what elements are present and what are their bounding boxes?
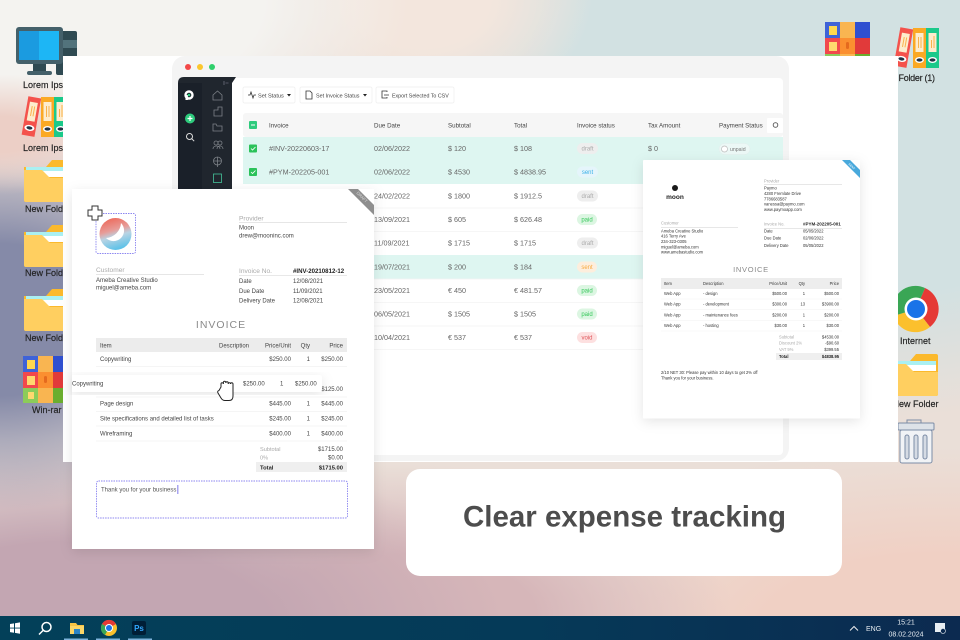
- table header: Payment Status: [719, 122, 763, 129]
- row 3: draft: [581, 194, 594, 200]
- invoice table: [243, 113, 783, 350]
- label: New Folder: New Folder: [892, 399, 939, 409]
- row 9: 10/04/2021: [374, 333, 410, 342]
- ribbon: sent: [842, 160, 860, 178]
- row 8: [374, 308, 597, 320]
- totals: 0%: [260, 456, 268, 462]
- table header: Total: [514, 122, 527, 129]
- desktop icons: left column: [16, 27, 77, 415]
- items table: Price/Unit: [265, 343, 291, 349]
- row 1: unpaid: [730, 147, 746, 153]
- row 9: € 537: [448, 333, 466, 342]
- customer block: miguel@ameba.com: [661, 244, 699, 250]
- provider block: Provider: [239, 216, 264, 222]
- items table: [661, 278, 842, 331]
- row 2: #PYM-202205-001: [269, 168, 329, 176]
- row 2: 02/06/2022: [374, 168, 410, 176]
- icon: move cursor cross: [88, 206, 102, 220]
- icon: win-rar archive top right: [825, 22, 870, 69]
- invoice meta: Invoice No.: [764, 222, 784, 226]
- items table: - development: [703, 302, 730, 306]
- items table: - maintenance fees: [703, 312, 738, 318]
- panel: app window: [172, 56, 789, 461]
- panel: right invoice document: [643, 160, 860, 418]
- row dividers: [243, 208, 783, 350]
- icon: search: [186, 134, 194, 141]
- provider block: drew@mooninc.com: [239, 234, 294, 240]
- provider block: vanessa@paymo.com: [764, 202, 805, 206]
- row 6: 19/07/2021: [374, 262, 410, 272]
- items table: Item: [100, 343, 112, 349]
- provider block: 7786683587: [764, 196, 787, 202]
- table header: [243, 113, 783, 137]
- invoice meta: 11/09/2021: [293, 289, 323, 295]
- row 2: $ 4530: [448, 168, 470, 176]
- items table: $300.00: [772, 302, 788, 306]
- icon: binders top right: [894, 27, 939, 68]
- label: New Folder two: New Folder: [25, 268, 71, 278]
- ribbon: draft: DRAFT: [356, 190, 369, 204]
- totals: $0.00: [328, 456, 344, 462]
- totals: Total: [779, 354, 788, 359]
- table header: Subtotal: [448, 122, 471, 129]
- table header: Tax Amount: [648, 122, 681, 129]
- items table: $125.00: [321, 387, 344, 393]
- row 9: void: [581, 336, 593, 342]
- invoice meta: Delivery Date: [764, 243, 789, 248]
- row 6: sent: [581, 265, 593, 271]
- items table: $500.00: [772, 291, 788, 296]
- totals: $1715.00: [318, 447, 344, 453]
- callout: Clear expense tracking: Clear expense tracking: [463, 500, 786, 534]
- invoice meta: Invoice No.: [239, 268, 272, 275]
- system tray: 15:21: [897, 620, 915, 626]
- label: Lorem Ipsum second: Lorem Ipsum: [23, 143, 76, 153]
- items table: Qty: [799, 281, 806, 286]
- dragged table row: 1: [280, 382, 284, 388]
- row 1: #INV-20220603-17: [269, 144, 329, 153]
- row 5: draft: [581, 241, 594, 247]
- row 8: paid: [581, 312, 593, 318]
- items table: $30.00: [826, 323, 840, 328]
- items table: Web App: [664, 323, 681, 328]
- panel: white showcase card: [63, 56, 898, 462]
- ribbon: draft: [348, 189, 374, 215]
- customer block: miguel@ameba.com: [96, 286, 151, 292]
- invoice meta: Due Date: [239, 289, 265, 295]
- items table: - hosting: [703, 323, 719, 328]
- panel: left invoice document: [72, 189, 374, 549]
- dragged table row: $250.00: [243, 382, 265, 388]
- row 1: draft: [581, 147, 594, 153]
- items table: $200.00: [824, 312, 840, 318]
- items table: Price: [830, 281, 840, 286]
- customer block: [661, 220, 738, 254]
- row 7: [374, 285, 597, 296]
- row 3: 24/02/2022: [374, 192, 410, 200]
- items table: $400.00: [321, 432, 344, 438]
- row 7: € 450: [448, 286, 466, 295]
- totals: $4530.00: [822, 334, 840, 340]
- toolbar buttons: Set Invoice Status: [316, 94, 360, 100]
- icon: chrome browser: [892, 286, 939, 332]
- totals: Total: [260, 465, 274, 471]
- customer block: 416 Terry Ave: [661, 234, 687, 238]
- items table: $445.00: [321, 402, 344, 408]
- row 3: $ 1800: [448, 192, 470, 200]
- items table: Price/Unit: [769, 281, 788, 286]
- provider block: 4280 Fremlate Drive: [764, 191, 802, 196]
- items table: $245.00: [321, 416, 344, 422]
- items table: 1: [803, 323, 806, 328]
- totals: $1715.00: [319, 465, 343, 471]
- icon: computer: [16, 27, 77, 75]
- row 4: 13/09/2021: [374, 215, 410, 224]
- invoice meta: [764, 222, 842, 248]
- customer block: 234-323-0305: [661, 239, 687, 244]
- icon: win-rar archive: [23, 356, 68, 403]
- row 1: $ 0: [648, 144, 658, 153]
- invoice meta: Due Date: [764, 236, 782, 240]
- items table: Wireframing: [100, 432, 132, 438]
- row 8: 06/05/2021: [374, 310, 410, 318]
- totals: [776, 334, 842, 360]
- customer block: [96, 267, 204, 292]
- icon: recycle bin: [898, 420, 934, 463]
- toolbar buttons: Set Status: [258, 94, 284, 100]
- window control dots: [185, 64, 215, 70]
- totals: VAT 9%: [779, 347, 794, 352]
- items table: $250.00: [321, 357, 344, 363]
- items table: $445.00: [269, 402, 292, 408]
- row 5: 11/09/2021: [374, 238, 409, 248]
- row 2: sent: [582, 170, 594, 176]
- row 6: $ 184: [514, 262, 532, 272]
- invoice meta: [239, 268, 347, 304]
- provider block: Provider: [764, 178, 780, 184]
- row 5: [374, 238, 598, 248]
- heading: INVOICE: INVOICE: [196, 319, 246, 331]
- table header: Invoice status: [577, 122, 615, 129]
- icon: binders: [22, 96, 67, 137]
- row 6: [374, 262, 597, 272]
- dragged table row: Copywriting: [72, 382, 103, 388]
- dragged table row: $250.00: [295, 382, 317, 388]
- invoice meta: #PYM-202205-001: [803, 222, 841, 226]
- invoice meta: 12/08/2021: [293, 279, 324, 285]
- system tray: 08.02.2024: [888, 632, 924, 638]
- row 9: € 537: [514, 333, 532, 342]
- logo: moon: moon: [666, 194, 684, 201]
- row checkboxes: [249, 144, 257, 176]
- invoice meta: Delivery Date: [239, 298, 276, 304]
- dark sidebar: [178, 77, 236, 200]
- totals: Discount 2%: [779, 340, 802, 346]
- totals: $4838.95: [822, 354, 840, 359]
- icon: collapse toggle: [224, 81, 228, 85]
- label: Folder (1): Folder (1): [898, 73, 935, 83]
- items table: Description: [219, 343, 249, 349]
- items table: [96, 338, 347, 441]
- row 5: $ 1715: [448, 238, 470, 248]
- icon: windows start: [10, 622, 20, 634]
- label: New Folder one: New Folder: [25, 204, 71, 214]
- totals: Subtotal: [779, 334, 794, 340]
- items table: $3900.00: [822, 302, 840, 306]
- row 4: [374, 214, 597, 225]
- system tray: ENG: [866, 626, 881, 633]
- icon: photoshop: Ps: [134, 624, 144, 633]
- items table: Qty: [301, 343, 310, 349]
- row 4: $ 605: [448, 215, 466, 224]
- payment note: Thank you for your business.: [661, 376, 714, 380]
- row 5: $ 1715: [514, 238, 536, 248]
- items table: 1: [803, 291, 806, 296]
- provider block: www.paymoapp.com: [764, 207, 802, 212]
- items table: $30.00: [774, 323, 788, 328]
- sidebar navigation icons: [213, 91, 223, 182]
- row 4: paid: [581, 218, 593, 224]
- label: Lorem Ipsum: Lorem Ipsum: [23, 80, 76, 90]
- row 6: $ 200: [448, 262, 466, 272]
- row 8: $ 1505: [448, 310, 470, 318]
- icon: folder one: [24, 160, 74, 202]
- totals: $399.55: [824, 347, 840, 352]
- icon: grabbing hand cursor: [218, 381, 233, 400]
- icon: folder: [888, 354, 938, 396]
- icon: search: [39, 622, 51, 634]
- items table: Web App: [664, 312, 681, 318]
- row 2: $ 4838.95: [514, 168, 546, 176]
- windows taskbar: [0, 616, 960, 640]
- row 2: [269, 166, 598, 178]
- row 1: $ 108: [514, 144, 532, 153]
- row 7: € 481.57: [514, 286, 542, 295]
- row 3: $ 1912.5: [514, 192, 542, 200]
- payment note: 2/10 NET 30: Please pay within 10 days to get 2% off: [661, 370, 758, 375]
- provider block: Paymo: [764, 186, 777, 190]
- row 4: $ 626.48: [514, 215, 542, 224]
- items table: Web App: [664, 302, 681, 306]
- items table: - design: [703, 291, 718, 296]
- items table: 1: [307, 432, 311, 438]
- customer block: Ameba Creative Studio: [661, 228, 704, 234]
- icon: logo: [186, 92, 192, 100]
- items table: 1: [307, 402, 311, 408]
- table header: Invoice: [269, 122, 289, 129]
- callout: Clear expense tracking: [406, 469, 842, 576]
- toolbar buttons: [243, 87, 454, 103]
- icon: folder two: [24, 225, 74, 267]
- row 8: $ 1505: [514, 310, 536, 318]
- icon: add button: [185, 114, 195, 124]
- row 7: paid: [581, 289, 593, 295]
- notes box: [96, 481, 348, 518]
- heading: INVOICE: INVOICE: [733, 265, 769, 274]
- payment note: [661, 370, 758, 380]
- items table: Web App: [664, 291, 681, 296]
- items table: 1: [307, 357, 311, 363]
- provider block: [239, 216, 347, 240]
- dragged table row: [72, 375, 322, 392]
- items table: 13: [800, 302, 806, 306]
- totals: [256, 447, 347, 472]
- invoice meta: #INV-20210812-12: [293, 268, 345, 275]
- label: Win-rar: Win-rar: [32, 405, 62, 415]
- desktop icons: right column: [825, 22, 939, 463]
- provider block: Moon: [239, 226, 254, 232]
- row 1: [269, 143, 750, 154]
- invoice meta: 05/05/2022: [803, 243, 824, 248]
- customer block: Ameba Creative Studio: [96, 278, 158, 284]
- items table: Description: [703, 281, 724, 286]
- label: New Folder three: New Folder: [25, 333, 71, 343]
- row 1: 02/06/2022: [374, 144, 410, 153]
- invoice meta: 12/08/2021: [293, 298, 324, 304]
- items table: $500.00: [824, 291, 840, 296]
- customer block: Customer: [96, 267, 125, 274]
- invoice meta: Date: [764, 228, 773, 234]
- row 9: [374, 332, 597, 343]
- toolbar buttons: Export Selected To CSV: [392, 94, 449, 100]
- icon: chrome: [96, 620, 120, 640]
- logo: moon: [666, 185, 684, 201]
- totals: Subtotal: [260, 447, 281, 453]
- items table: Site specifications and detailed list of tasks: [100, 416, 214, 422]
- invoice meta: Date: [239, 279, 252, 285]
- invoice meta: 05/05/2022: [803, 228, 824, 234]
- label: Internet: Internet: [900, 336, 931, 346]
- invoice meta: 02/06/2022: [803, 236, 824, 240]
- icon: file explorer: [64, 623, 88, 640]
- items table: Copywriting: [100, 357, 131, 363]
- customer block: www.amebastudio.com: [661, 250, 704, 254]
- items table: $250.00: [269, 357, 292, 363]
- system tray: [850, 620, 946, 638]
- notes box: Thank you for your business: [101, 488, 176, 494]
- customer block: Customer: [661, 220, 679, 226]
- items table: Item: [664, 281, 673, 286]
- items table: 1: [803, 312, 806, 318]
- items table: $400.00: [269, 432, 292, 438]
- row 3: [374, 190, 598, 202]
- totals: -$90.60: [825, 340, 840, 346]
- table header: Due Date: [374, 122, 401, 129]
- row 7: 23/05/2021: [374, 286, 410, 295]
- row 1: $ 120: [448, 144, 466, 153]
- icon: folder three: [24, 289, 74, 331]
- icon: photoshop: [128, 621, 152, 640]
- items table: 1: [307, 416, 311, 422]
- items table: Price: [329, 343, 344, 349]
- logo placeholder with dashed box: [96, 214, 136, 254]
- items table: Page design: [100, 402, 133, 408]
- items table: $245.00: [269, 416, 292, 422]
- highlighted rows: [243, 137, 783, 279]
- provider block: [764, 178, 842, 212]
- ribbon: sent: SENT: [847, 162, 856, 171]
- items table: $200.00: [772, 312, 788, 318]
